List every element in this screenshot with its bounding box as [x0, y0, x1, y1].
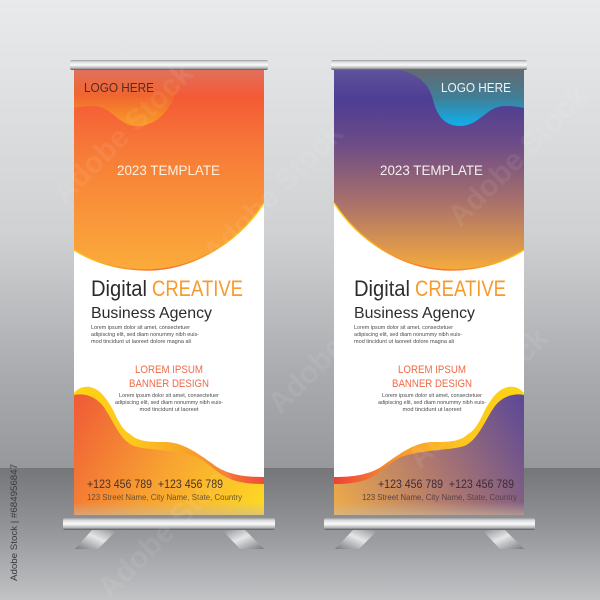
left lorem heading [129, 364, 209, 390]
left lorem heading: BANNER DESIGN [129, 378, 209, 390]
left header notch [74, 70, 195, 126]
right header shape [334, 70, 524, 270]
right centered paragraph: Lorem ipsum dolor sit amet, consectetuer [382, 393, 482, 399]
left wave band [74, 387, 264, 490]
left lorem heading: LOREM IPSUM [135, 364, 203, 376]
right template heading: 2023 TEMPLATE [380, 163, 483, 178]
left centered paragraph: mod tincidunt ut laoreet [140, 407, 199, 413]
right centered paragraph: adipiscing elit, sed diam nonummy nibh euis- [378, 400, 486, 406]
stock watermarks: Adobe Stock [197, 117, 350, 270]
left creative word: CREATIVE [152, 276, 243, 301]
right creative word: CREATIVE [415, 276, 506, 301]
left bottom rail [63, 518, 275, 530]
right address: 123 Street Name, City Name, State, Country [362, 492, 518, 502]
left paragraph: mod tincidunt ut laoreet dolore magna ali [91, 339, 191, 345]
left paragraph [91, 325, 199, 345]
right feet [335, 530, 524, 549]
right bottom rail [324, 518, 535, 530]
right paragraph: Lorem ipsum dolor sit amet, consectetuer [354, 325, 453, 331]
left template heading: 2023 TEMPLATE [117, 163, 220, 178]
left feet [75, 530, 264, 549]
left logo text: LOGO HERE [84, 81, 154, 95]
left main heading: Digital [91, 276, 147, 301]
background wall [0, 0, 600, 468]
right paragraph [354, 325, 462, 345]
right logo text: LOGO HERE [441, 81, 511, 95]
stock watermarks: Adobe Stock [442, 80, 595, 233]
right centered paragraph: mod tincidunt ut laoreet [402, 407, 462, 413]
stock watermarks: Adobe Stock [47, 57, 200, 210]
left centered paragraph: adipiscing elit, sed diam nonummy nibh euis- [115, 400, 223, 406]
right paragraph: mod tincidunt ut laoreet dolore magna ali [354, 339, 454, 345]
right banner sheet [334, 70, 524, 515]
right lorem heading: LOREM IPSUM [398, 364, 466, 376]
floor [0, 468, 600, 600]
right paragraph: adipiscing elit, sed diam nonummy nibh euis- [354, 332, 462, 338]
right subheading: Business Agency [354, 305, 475, 322]
left subheading: Business Agency [91, 305, 212, 322]
left centered paragraph: Lorem ipsum dolor sit amet, consectetuer [119, 393, 219, 399]
left roll-up banner [63, 60, 275, 549]
stock watermarks: Adobe Stock [262, 267, 415, 420]
right wave fill [334, 394, 524, 515]
right header curve edge [334, 203, 524, 270]
right wave band [334, 387, 524, 490]
right roll-up banner [324, 60, 535, 549]
left header curve edge [74, 203, 264, 270]
left banner sheet [74, 70, 264, 515]
side credit text: Adobe Stock | #684956847 [9, 464, 20, 581]
right main heading: Digital [354, 276, 410, 301]
stock watermarks: Adobe Stock [402, 322, 555, 475]
left phone numbers: +123 456 789 +123 456 789 [87, 479, 223, 491]
left wave fill [74, 394, 264, 515]
left paragraph: Lorem ipsum dolor sit amet, consectetuer [91, 325, 190, 331]
left address: 123 Street Name, City Name, State, Country [87, 492, 243, 502]
right lorem heading [392, 364, 472, 390]
left paragraph: adipiscing elit, sed diam nonummy nibh euis- [91, 332, 199, 338]
right lorem heading: BANNER DESIGN [392, 378, 472, 390]
left centered paragraph [115, 393, 223, 413]
right centered paragraph [378, 393, 486, 413]
left top rail [70, 60, 268, 70]
right header notch [400, 70, 524, 126]
left header shape [74, 70, 264, 270]
right phone numbers: +123 456 789 +123 456 789 [378, 479, 514, 491]
right top rail [331, 60, 527, 70]
